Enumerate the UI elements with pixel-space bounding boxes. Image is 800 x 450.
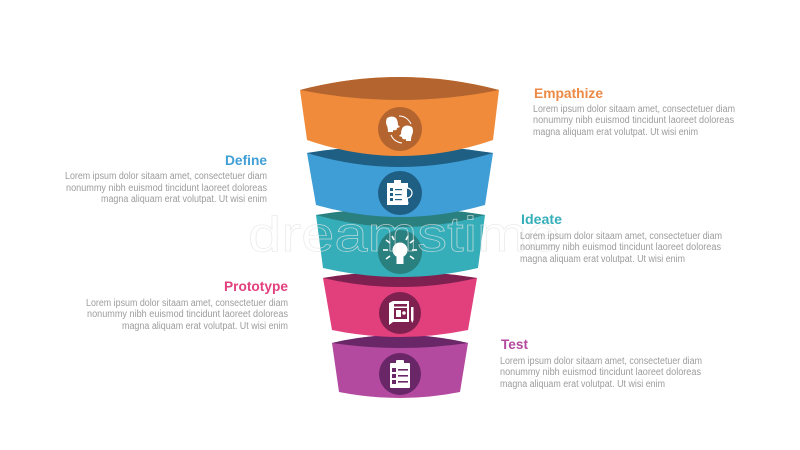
text block: prototype: Prototype [224, 279, 288, 294]
text block: define: Lorem ipsum dolor sitaam amet, consectetuer diam [65, 171, 267, 182]
icon: clipboard with magnifier [387, 180, 412, 205]
text block: empathize [533, 86, 735, 138]
funnel segment: define [307, 146, 493, 217]
text block: empathize: Lorem ipsum dolor sitaam amet, consectetuer diam [533, 104, 735, 115]
text block: test: Lorem ipsum dolor sitaam amet, consectetuer diam [500, 356, 702, 367]
text block: prototype: Lorem ipsum dolor sitaam amet, consectetuer diam [86, 298, 288, 309]
text block: empathize: magna aliquam erat volutpat. Ut wisi enim [533, 127, 698, 138]
text block: test: Test [501, 337, 528, 352]
text block: empathize: Empathize [534, 86, 604, 101]
text block: ideate: nonummy nibh euismod tincidunt laoreet doloreas [520, 242, 721, 253]
icon: light bulb [383, 236, 417, 264]
text block: test [500, 337, 702, 390]
text block: ideate: magna aliquam erat volutpat. Ut wisi enim [520, 254, 685, 265]
icon: two heads with arrows [386, 116, 413, 143]
text block: define: magna aliquam erat volutpat. Ut wisi enim [101, 194, 267, 205]
text block: ideate: Ideate [521, 212, 563, 227]
text block: prototype: magna aliquam erat volutpat. Ut wisi enim [122, 321, 288, 332]
funnel segment: prototype [323, 272, 477, 337]
text block: define: Define [225, 153, 267, 168]
funnel segment: ideate [316, 208, 485, 277]
text block: prototype [86, 279, 288, 332]
icon: checklist [390, 360, 410, 388]
icon: blueprint and pencil [389, 301, 414, 325]
text block: define [65, 153, 267, 205]
text block: ideate [520, 212, 722, 265]
text block: empathize: nonummy nibh euismod tincidunt laoreet doloreas [533, 115, 734, 126]
funnel segment: empathize [300, 77, 499, 156]
watermark: dreamstime [248, 208, 560, 262]
text block: define: nonummy nibh euismod tincidunt laoreet doloreas [66, 183, 267, 194]
text block: prototype: nonummy nibh euismod tincidunt laoreet doloreas [87, 309, 288, 320]
text block: test: nonummy nibh euismod tincidunt laoreet doloreas [500, 367, 701, 378]
text block: ideate: Lorem ipsum dolor sitaam amet, consectetuer diam [520, 231, 722, 242]
funnel segment: test [332, 335, 468, 398]
text block: test: magna aliquam erat volutpat. Ut wisi enim [500, 379, 665, 390]
